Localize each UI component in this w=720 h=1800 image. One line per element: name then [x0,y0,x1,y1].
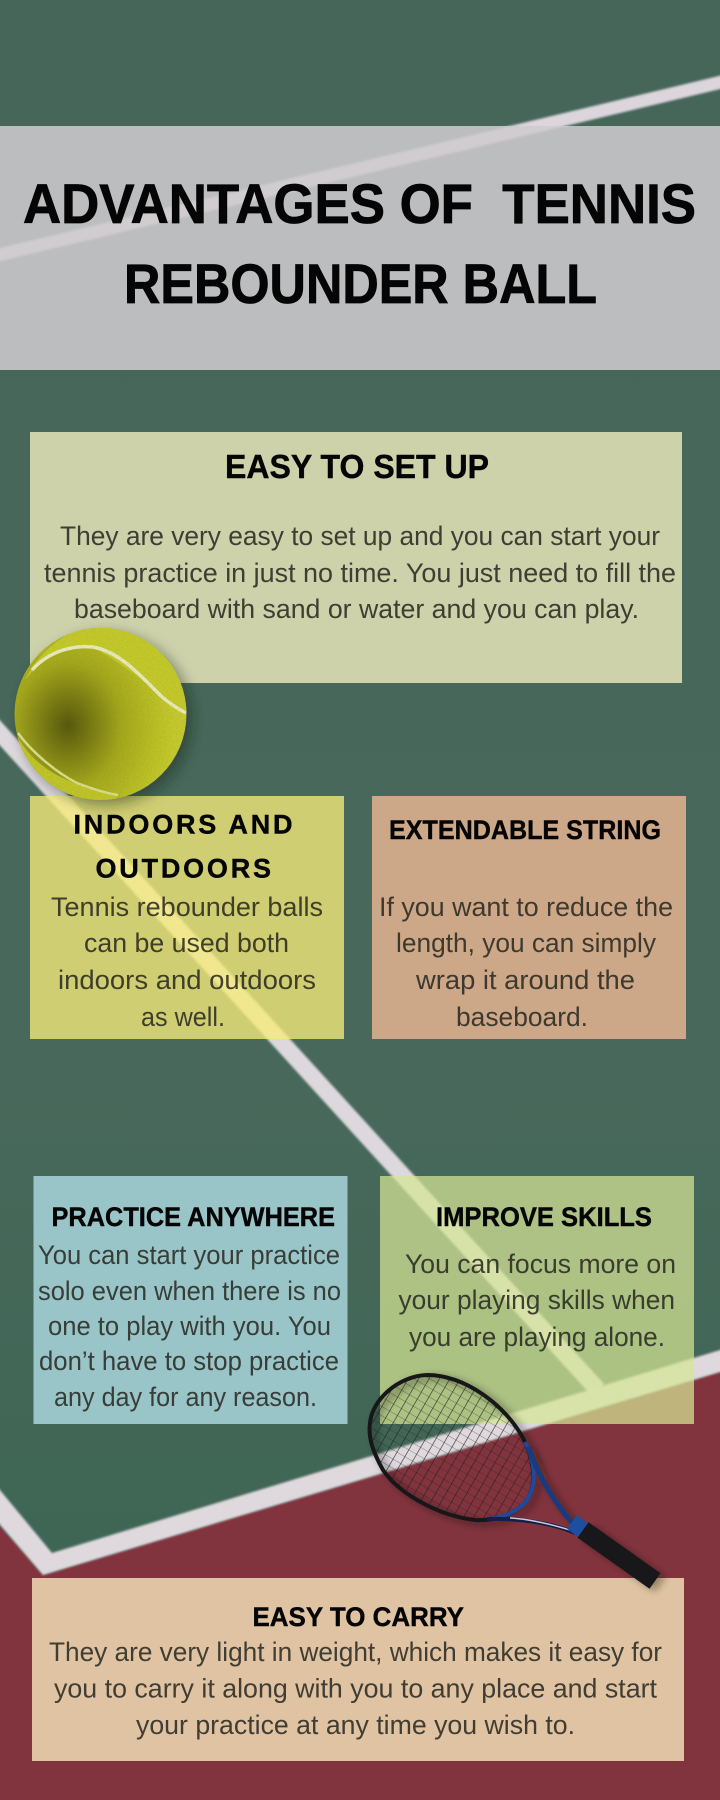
icon: tennis ball [12,625,195,810]
body: extendable string: length, you can simply [396,928,656,958]
heading: extendable string: EXTENDABLE STRING [389,815,661,845]
racket strings [372,1377,532,1518]
body: practice anywhere: You can start your practice [38,1240,340,1270]
upper felt crescent [25,625,195,713]
body: easy to carry [49,1637,662,1740]
body: practice anywhere: solo even when there is no [38,1276,341,1306]
panel: indoors and outdoors [30,796,344,1039]
racket grip [572,1522,584,1531]
body: improve skills: You can focus more on [405,1249,676,1279]
heading: indoors and outdoors: INDOORS AND [74,810,292,840]
icon: tennis racket [368,1371,668,1594]
heading: easy to carry: EASY TO CARRY [252,1602,464,1632]
body: easy to set up: They are very easy to set up and you can start your [60,521,660,551]
lower seam [18,733,118,795]
title line 2: REBOUNDER BALL [124,252,597,315]
body: indoors and outdoors [51,892,323,1032]
panel: easy to set up [30,432,682,683]
body: extendable string: If you want to reduce the [379,892,673,922]
title line 1: ADVANTAGES OF TENNIS [23,172,696,235]
panel: improve skills [380,1176,694,1424]
body: indoors and outdoors: as well. [141,1002,225,1032]
title banner [0,126,720,370]
racket throat [528,1447,575,1526]
court line: upper diagonal [0,80,720,257]
seam [32,647,186,713]
body: indoors and outdoors: Tennis rebounder balls [51,892,323,922]
heading: indoors and outdoors: OUTDOORS [96,854,271,884]
racket frame [370,1375,533,1520]
body: practice anywhere: any day for any reason. [54,1382,317,1412]
heading: practice anywhere: PRACTICE ANYWHERE [52,1202,335,1232]
court line: long diagonal [0,722,598,1390]
panel: practice anywhere [34,1176,348,1424]
body: extendable string [379,892,673,1032]
body: easy to set up: tennis practice in just no time. You just need to fill the [44,558,676,588]
body: practice anywhere [38,1240,341,1412]
body: extendable string: wrap it around the [415,965,635,995]
body: indoors and outdoors: can be used both [84,928,289,958]
body: improve skills [398,1249,676,1352]
body: practice anywhere: one to play with you. You [48,1311,331,1341]
court line: baseline corner [0,1347,720,1575]
body: easy to carry: They are very light in weight, which makes it easy for [49,1637,662,1667]
panel: easy to carry [32,1578,684,1761]
body: easy to carry: your practice at any time you wish to. [136,1710,575,1740]
body: indoors and outdoors: indoors and outdoors [58,965,316,995]
lower felt crescent [18,737,117,800]
body: improve skills: you are playing alone. [409,1322,665,1352]
heading: easy to set up: EASY TO SET UP [225,449,489,486]
panel: extendable string [372,796,686,1039]
body: easy to set up: baseboard with sand or water and you can play. [74,594,639,624]
body: extendable string: baseboard. [456,1002,588,1032]
heading: improve skills: IMPROVE SKILLS [436,1202,652,1232]
heading: indoors and outdoors [74,810,292,884]
body: easy to carry: you to carry it along with you to any place and start [54,1674,657,1704]
body: practice anywhere: don’t have to stop practice [39,1346,339,1376]
red court surface [0,1369,720,1800]
body: improve skills: your playing skills when [398,1285,675,1315]
body: easy to set up [44,521,676,624]
